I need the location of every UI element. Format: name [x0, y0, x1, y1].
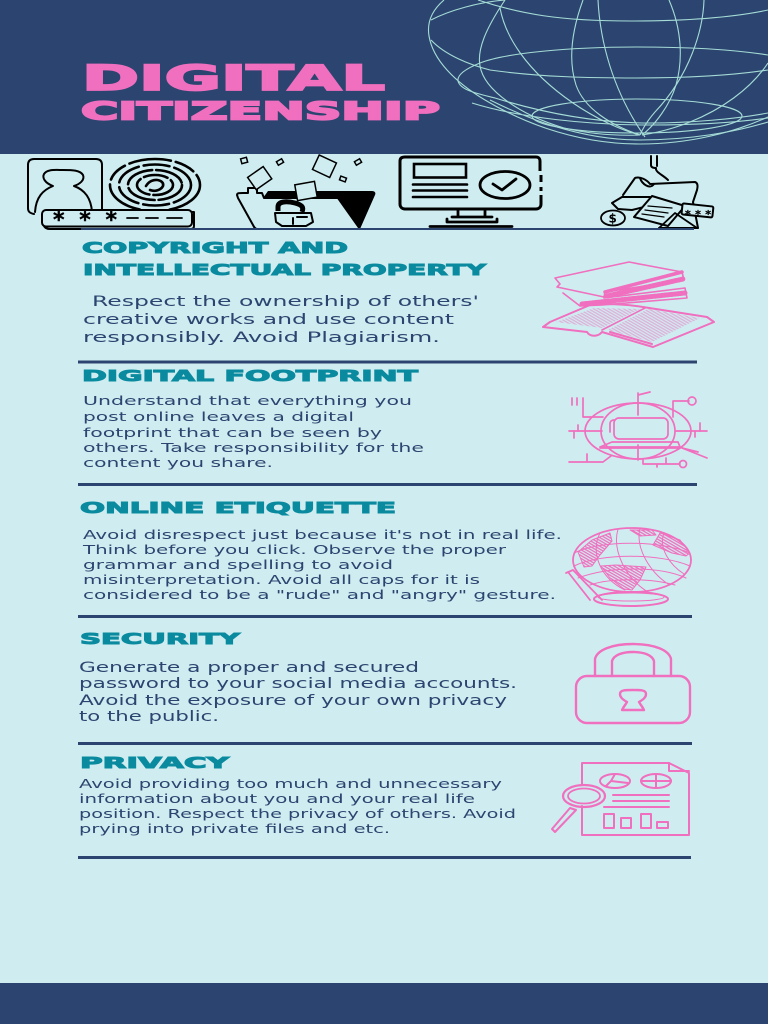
text: footprint body: footprint that can be seen by [83, 425, 383, 440]
icon: folder with lock [237, 155, 375, 229]
icon: phishing hook: *** [685, 208, 711, 221]
text: footprint body [83, 393, 424, 470]
panel: online etiquette [80, 499, 691, 606]
icon: digital network globe [569, 392, 707, 468]
title: CITIZENSHIP [81, 96, 440, 126]
icon: books [543, 262, 714, 347]
text: security body: Avoid the exposure of your own privacy [79, 693, 507, 709]
text: etiquette body: Think before you click. Observe the proper [81, 542, 507, 557]
panel: digital footprint [82, 367, 707, 470]
icon: phishing hook [601, 156, 713, 228]
icon: document with magnifier [552, 763, 689, 835]
heading: digital footprint: DIGITAL FOOTPRINT [82, 367, 419, 385]
icon: padlock [576, 644, 690, 723]
title: DIGITAL [82, 59, 385, 99]
text: etiquette body: grammar and spelling to avoid [83, 557, 393, 572]
panel: copyright and intellectual property [82, 239, 714, 347]
icon: phishing hook: $ [608, 212, 617, 226]
text: privacy body: prying into private files and etc. [79, 821, 390, 836]
panel: security [79, 630, 690, 725]
heading: security: SECURITY [80, 630, 241, 648]
icon: profile, fingerprint and password [28, 159, 200, 233]
text: copyright body: creative works and use content [83, 312, 454, 328]
text: privacy body [79, 776, 516, 836]
text: copyright body: responsibly. Avoid Plagiarism. [83, 330, 440, 346]
text: security body [79, 660, 517, 725]
text: copyright body [83, 294, 479, 346]
dividers [78, 228, 697, 859]
text: etiquette body: misinterpretation. Avoid all caps for it is [83, 572, 480, 587]
text: footprint body: content you share. [83, 455, 273, 470]
heading: copyright: INTELLECTUAL PROPERTY [83, 261, 487, 279]
text: security body: password to your social media accounts. [79, 676, 517, 692]
text: privacy body: information about you and your real life [79, 791, 475, 806]
text: etiquette body [81, 527, 562, 602]
icon: desk globe [566, 528, 691, 606]
panel: privacy [79, 754, 689, 836]
heading: online etiquette: ONLINE ETIQUETTE [80, 499, 396, 517]
text: footprint body: others. Take responsibility for the [83, 440, 424, 455]
text: footprint body: post online leaves a digital [83, 409, 354, 424]
text: etiquette body: considered to be a "rude" and "angry" gesture. [83, 587, 556, 602]
text: security body: Generate a proper and secured [79, 660, 419, 676]
heading: privacy: PRIVACY [80, 754, 231, 772]
text: copyright body: Respect the ownership of others' [92, 294, 479, 310]
heading: copyright [82, 239, 487, 279]
text: security body: to the public. [79, 709, 219, 725]
text: etiquette body: Avoid disrespect just because it's not in real life. [83, 527, 562, 542]
heading: copyright: COPYRIGHT AND [82, 239, 348, 257]
icon row [28, 155, 713, 233]
icon: wireframe globe [428, 0, 768, 144]
icon: computer monitor with check mark [400, 157, 541, 226]
title [81, 59, 440, 126]
text: privacy body: Avoid providing too much and unnecessary [79, 776, 503, 791]
text: privacy body: position. Respect the privacy of others. Avoid [79, 806, 516, 821]
header band [0, 0, 768, 154]
icon: profile, fingerprint and password: *** [53, 208, 117, 233]
text: footprint body: Understand that everything you [83, 393, 412, 408]
footer band [0, 983, 768, 1024]
